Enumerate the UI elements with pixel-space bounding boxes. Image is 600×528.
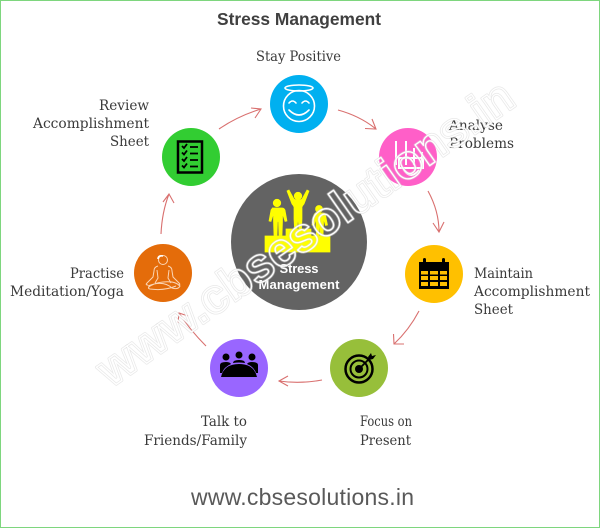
- label: maintain accomplishment sheet: [473, 266, 590, 318]
- hub label: Management: [258, 277, 340, 292]
- label: review accomplishment sheet: Accomplishment: [32, 116, 149, 132]
- label: maintain accomplishment sheet: Accomplishment: [473, 284, 590, 300]
- label: talk to friends/family: [144, 414, 247, 449]
- label: practise meditation/yoga: Meditation/Yoga: [10, 284, 124, 300]
- title: Stress Management: [217, 9, 381, 29]
- node: focus on present: [330, 339, 388, 397]
- label: analyse problems: [448, 118, 514, 152]
- label: focus on present: [360, 414, 412, 449]
- icon: target with dart: [346, 353, 376, 382]
- label: practise meditation/yoga: [10, 266, 124, 300]
- icon: people on podium: [265, 190, 330, 252]
- label: maintain accomplishment sheet: Sheet: [474, 302, 513, 318]
- icon: people at table: [220, 352, 258, 377]
- label: analyse problems: Analyse: [448, 118, 503, 134]
- icon: smiling angel face: [284, 85, 314, 122]
- label: talk to friends/family: Friends/Family: [144, 433, 247, 449]
- label: talk to friends/family: Talk to: [201, 414, 247, 430]
- footer url: www.cbsesolutions.in: [190, 484, 414, 510]
- icon: chart in hand: [396, 141, 423, 175]
- label: maintain accomplishment sheet: Maintain: [474, 266, 533, 282]
- label: focus on present: Focus on: [360, 414, 412, 430]
- label: practise meditation/yoga: Practise: [70, 266, 124, 282]
- arrow: analyse to maintain: [428, 191, 444, 232]
- node: talk to friends/family: [210, 339, 268, 397]
- label: review accomplishment sheet: [32, 98, 149, 150]
- node: stay positive: [270, 75, 328, 133]
- node: maintain accomplishment sheet: [405, 245, 463, 303]
- icon: calendar: [419, 258, 449, 289]
- arrow: practise to review: [161, 194, 174, 234]
- arrow: review to stay positive: [219, 108, 261, 129]
- watermark: www.cbsesolutions.in: [86, 70, 524, 398]
- center hub: stress management: [231, 174, 367, 310]
- icon: checklist: [178, 142, 202, 172]
- node: analyse problems: [379, 128, 437, 186]
- label: stay positive: Stay Positive: [256, 49, 341, 65]
- label: analyse problems: Problems: [449, 136, 514, 152]
- node: review accomplishment sheet: [162, 128, 220, 186]
- arrow: talk to practise: [178, 313, 206, 346]
- watermark: www.cbsesolutions.in: [86, 70, 524, 398]
- arrow: focus to talk: [279, 376, 322, 386]
- hub label: [258, 261, 340, 292]
- label: review accomplishment sheet: Review: [99, 98, 149, 114]
- label: focus on present: Present: [360, 433, 411, 449]
- arrow: maintain to focus: [394, 311, 419, 344]
- icon: meditating figure: [146, 256, 180, 290]
- node: practise meditation/yoga: [134, 244, 192, 302]
- hub label: Stress: [280, 261, 318, 276]
- label: review accomplishment sheet: Sheet: [110, 134, 149, 150]
- arrow: stay positive to analyse: [338, 110, 376, 129]
